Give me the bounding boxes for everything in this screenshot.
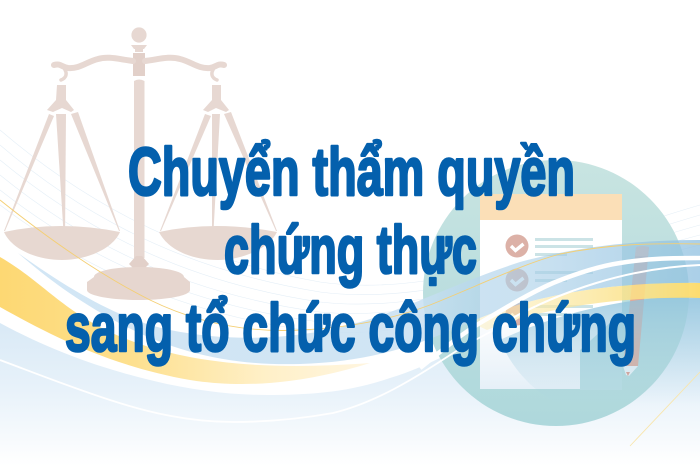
scales of justice: [4, 27, 277, 300]
scale column: [134, 80, 144, 258]
right pan: [159, 226, 277, 260]
illustration: document and pencil in circle: [423, 160, 689, 426]
document sheet: [480, 194, 622, 389]
white lower thin swoosh: [0, 322, 510, 422]
document header: [480, 194, 622, 220]
white main swoosh: [420, 258, 700, 368]
fine yellow curve: [0, 200, 700, 330]
fine yellow diagonal: [630, 372, 700, 446]
white swoosh thin: [500, 265, 700, 325]
pale blue band: [18, 240, 700, 364]
lower waves: [0, 200, 700, 446]
document lower-right cut: [580, 312, 622, 390]
pencil: [623, 246, 649, 376]
scale hub: [133, 53, 145, 76]
title line 2: chứng thực: [224, 212, 477, 288]
title: [65, 134, 636, 366]
left chains: [4, 114, 54, 231]
scale top finial: [131, 27, 147, 43]
left hanger: [47, 85, 74, 112]
check item 2: [506, 268, 593, 292]
right-hand blue below yellow: [500, 296, 700, 405]
check item 1: [506, 234, 593, 258]
teal circle: [423, 160, 689, 426]
left pan: [4, 226, 120, 260]
check item 3: [506, 302, 593, 326]
scale base: [87, 267, 190, 300]
background pale line work: [0, 130, 700, 333]
right chains: [160, 114, 211, 231]
scale beam: [54, 58, 224, 80]
yellow band: [0, 257, 370, 384]
scale column knob: [129, 256, 149, 271]
blue lower field: [0, 298, 700, 466]
right hanger: [203, 85, 229, 112]
right-hand yellow band: [470, 283, 700, 330]
